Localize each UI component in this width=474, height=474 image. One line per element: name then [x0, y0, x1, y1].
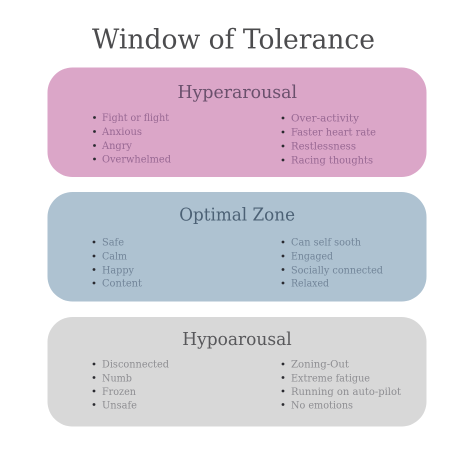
- list: optimal right: [282, 237, 383, 290]
- list: hyperarousal left: [93, 112, 171, 166]
- panel: hypoarousal: [48, 317, 426, 426]
- list: hypoarousal left: Disconnected: [102, 359, 169, 371]
- list: hypoarousal right: Zoning-Out: [291, 359, 350, 371]
- heading: hyperarousal: Hyperarousal: [178, 82, 297, 103]
- list: optimal right: Can self sooth: [291, 237, 361, 249]
- list: hypoarousal left: [93, 359, 169, 411]
- list: optimal left: Safe: [102, 237, 124, 249]
- heading: hypoarousal: Hypoarousal: [182, 329, 292, 350]
- list: hyperarousal right: Faster heart rate: [291, 127, 376, 139]
- list: optimal left: Happy: [102, 264, 134, 276]
- list: optimal right: Socially connected: [291, 264, 383, 276]
- list: optimal left: Content: [102, 278, 143, 290]
- list: hypoarousal right: No emotions: [291, 399, 353, 411]
- list: hyperarousal left: Fight or flight: [102, 112, 170, 124]
- list: hypoarousal right: Extreme fatigue: [291, 372, 370, 384]
- list: hyperarousal left: Anxious: [101, 126, 142, 138]
- list: hyperarousal right: Restlessness: [291, 141, 356, 153]
- list: hypoarousal right: [282, 359, 402, 411]
- list: hypoarousal left: Numb: [102, 372, 132, 384]
- list: optimal left: [93, 237, 143, 290]
- list: optimal right: Engaged: [291, 251, 333, 263]
- list: hypoarousal right: Running on auto-pilot: [291, 386, 402, 398]
- panel: hyperarousal: [48, 68, 426, 177]
- panel: optimal zone: [48, 192, 426, 302]
- list: hyperarousal right: Over-activity: [291, 113, 359, 125]
- list: optimal left: Calm: [102, 251, 127, 263]
- list: hyperarousal left: Angry: [101, 140, 132, 152]
- list: hyperarousal left: Overwhelmed: [102, 154, 171, 166]
- list: hypoarousal left: Unsafe: [102, 399, 137, 411]
- heading: optimal zone: Optimal Zone: [179, 205, 295, 226]
- list: hypoarousal left: Frozen: [102, 386, 136, 398]
- list: optimal right: Relaxed: [291, 278, 329, 290]
- list: hyperarousal right: [282, 113, 376, 167]
- list: hyperarousal right: Racing thoughts: [291, 155, 373, 167]
- title: Window of Tolerance: [92, 24, 375, 56]
